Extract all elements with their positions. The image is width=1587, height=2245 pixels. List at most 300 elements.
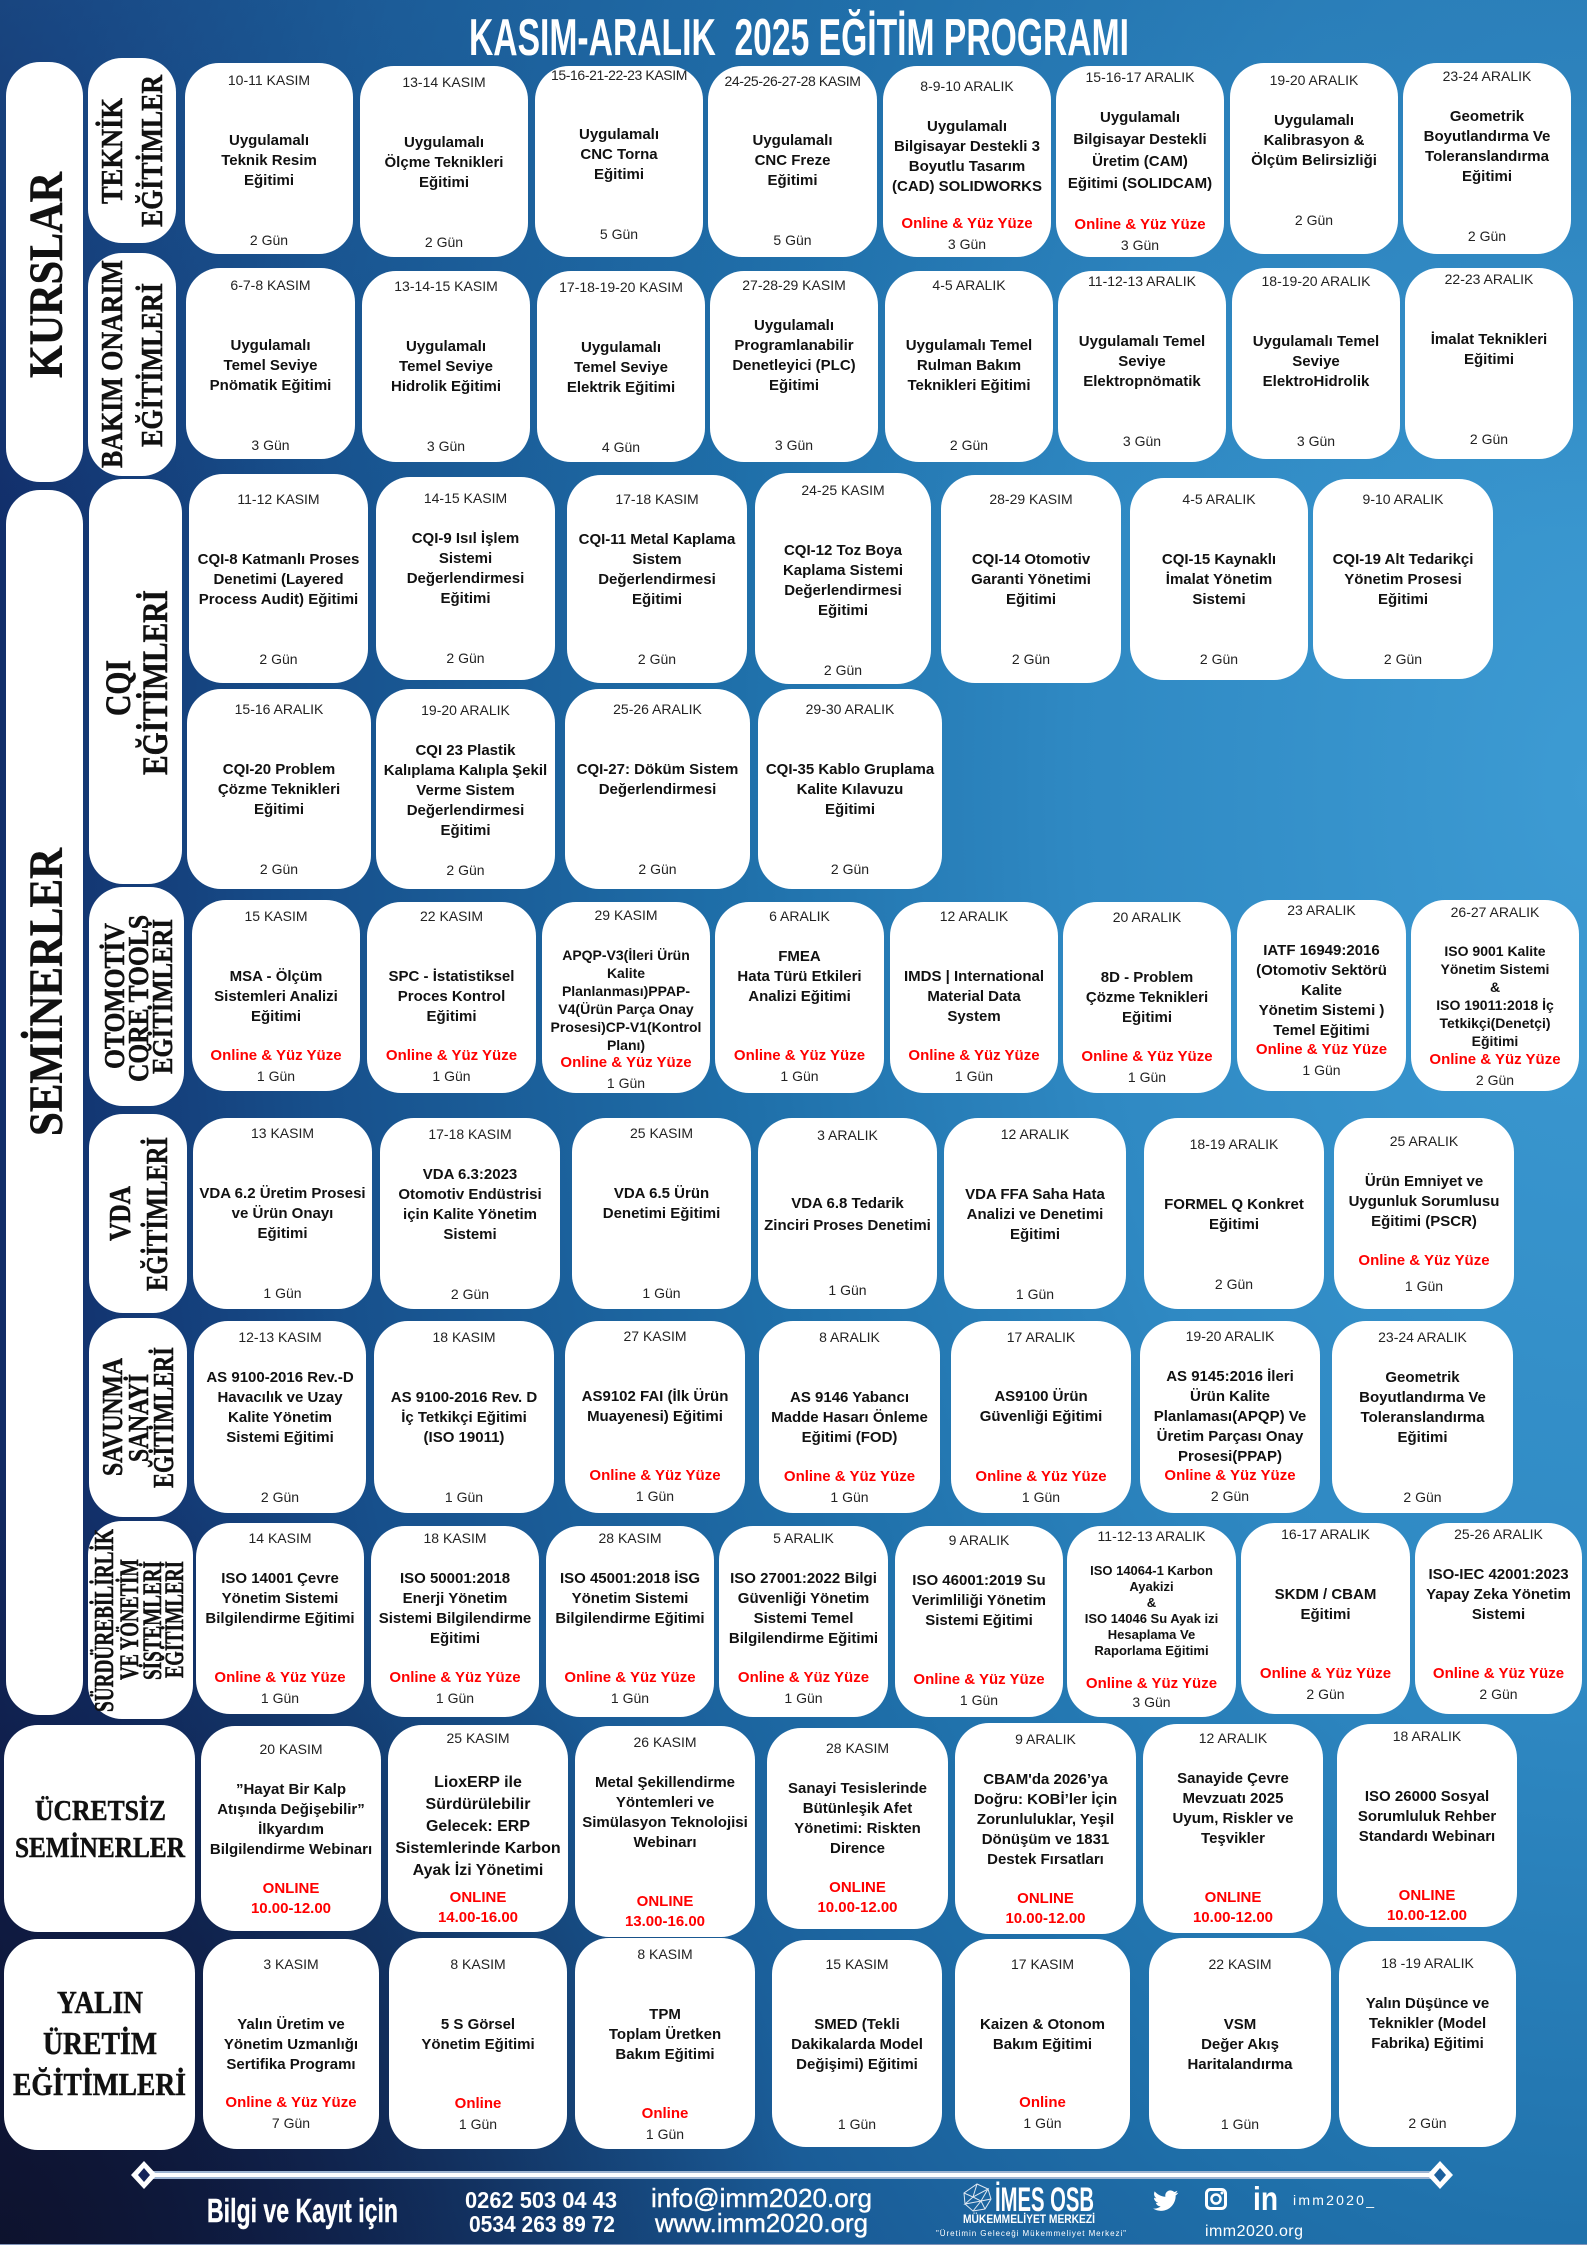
duration: 2 Gün: [1211, 1488, 1249, 1504]
panel: ÜCRETSİZ SEMİNERLER: SEMİNERLER: [15, 1833, 186, 1864]
date: 11-12-13 ARALIK: [1088, 273, 1196, 289]
card: SKDM / CBAM: [1241, 1523, 1410, 1714]
course title: Kaplama Sistemi: [783, 562, 903, 579]
format: Online & Yüz Yüze: [784, 1468, 915, 1485]
format: 13.00-16.00: [625, 1913, 705, 1930]
course title: Güvenliği Eğitimi: [980, 1408, 1102, 1425]
footer: phone numbers: 0262 503 04 43: [465, 2187, 617, 2213]
card: VSM: [1149, 1938, 1331, 2149]
logo: İMES OSB: "Üretimin Geleceği Mükemmeliyet Merkezi": [936, 2229, 1126, 2238]
course title: Eğitimi: [244, 172, 294, 189]
course title: [1256, 942, 1387, 1039]
course title: FMEA: [778, 948, 821, 965]
duration: 1 Gün: [1221, 2116, 1259, 2132]
course title: Dakikalarda Model: [791, 2036, 923, 2053]
format: Online & Yüz Yüze: [908, 1047, 1040, 1064]
course title: [579, 126, 659, 183]
card: Geometrik Boyutlandırma: [1403, 63, 1571, 254]
course title: Çözme Teknikleri: [1086, 989, 1208, 1006]
duration: 1 Gün: [1016, 1286, 1054, 1302]
format: Online & Yüz Yüze: [589, 1467, 721, 1484]
card: Yalın Üretim: [203, 1939, 379, 2149]
course title: [1333, 551, 1473, 608]
card: CQI-20: [187, 689, 371, 889]
duration: 1 Gün: [607, 1075, 645, 1091]
format: Online & Yüz Yüze: [210, 1047, 342, 1064]
course title: System: [947, 1008, 1001, 1025]
card: Kalibrasyon: [1230, 63, 1398, 254]
course title: Yönetim Sistemi ): [1259, 1002, 1384, 1019]
course title: Yönetim Uzmanlığı: [224, 2036, 358, 2053]
course title: Ölçme Teknikleri: [385, 154, 503, 171]
card: VDA 6.8: [758, 1118, 937, 1309]
course title: Eğitimi: [1472, 1033, 1518, 1049]
footer divider with diamonds: [131, 2161, 1453, 2189]
course title: Sistemi Bilgilendirme: [379, 1610, 531, 1627]
card: FMEA: [715, 902, 884, 1093]
course title: [196, 1569, 364, 1629]
card: IMDS: [890, 902, 1058, 1093]
format: Online & Yüz Yüze: [1256, 1041, 1387, 1058]
course title: [1086, 969, 1208, 1026]
duration: 1 Gün: [445, 1489, 483, 1505]
course title: İmalat Yönetim: [1166, 571, 1272, 588]
course title: Metal Şekillendirme: [595, 1774, 735, 1791]
course title: ISO 9001 Kalite: [1444, 943, 1546, 959]
date: 18-19 ARALIK: [1190, 1136, 1278, 1152]
course title: CNC Freze: [755, 152, 830, 169]
duration: 5 Gün: [600, 226, 638, 242]
duration: 2 Gün: [1200, 651, 1238, 667]
course title: Değer Akış: [1201, 2036, 1279, 2053]
date: 12 ARALIK: [1001, 1126, 1069, 1142]
duration: 1 Gün: [261, 1690, 299, 1706]
date: 9 ARALIK: [949, 1532, 1009, 1548]
course title: ISO-IEC 42001:2023: [1428, 1566, 1569, 1583]
format: Online & Yüz Yüze: [564, 1669, 696, 1686]
panel: VDA EĞİTİMLERİ: VDA: [102, 1186, 137, 1241]
panel: SEMİNERLER: SEMİNERLER: [20, 847, 73, 1136]
course title: [1332, 1368, 1513, 1448]
course title: [1162, 551, 1276, 608]
course title: [1431, 331, 1547, 368]
course title: AS 9145:2016 İleri: [1166, 1368, 1294, 1385]
panel: KURSLAR: KURSLAR: [20, 171, 73, 378]
course title: (ISO 19011): [424, 1429, 504, 1446]
course title: Eğitimi: [440, 590, 490, 607]
panel: YALIN ÜRETİM EĞİTİMLERİ: [4, 1939, 195, 2150]
format: Online & Yüz Yüze: [1074, 216, 1206, 233]
course title: Hata Türü Etkileri: [737, 968, 862, 985]
course title: [1149, 2015, 1331, 2075]
course title: Prosesi)CP-V1(Kontrol: [551, 1019, 701, 1035]
course title: CQI-15 Kaynaklı: [1162, 551, 1276, 568]
panel: SÜRDÜREBİLİRLİK VE YÖNETİM SİSTEMLERİ EĞİTİMLERİ: VE YÖNETİM: [115, 1559, 144, 1680]
course title: İmalat Teknikleri: [1431, 331, 1547, 348]
panel: SAVUNMA SANAYİ EĞİTİMLERİ: EĞİTİMLERİ: [147, 1347, 180, 1488]
panel: VDA EĞİTİMLERİ: [89, 1114, 187, 1313]
panel: OTOMOTİV CORE TOOLS EĞİTİMLERİ: [89, 887, 184, 1106]
icon: twitter: [1153, 2190, 1178, 2211]
date: 25 KASIM: [630, 1125, 693, 1141]
card: CQI-11: [567, 475, 747, 683]
duration: 2 Gün: [638, 651, 676, 667]
panel: SAVUNMA SANAYİ EĞİTİMLERİ: SANAYİ: [122, 1374, 155, 1462]
course title: [567, 339, 675, 396]
date: 13-14 KASIM: [402, 74, 486, 90]
course title: [1251, 112, 1377, 169]
course title: Gelecek: ERP: [426, 1818, 530, 1835]
duration: 3 Gün: [1297, 433, 1335, 449]
panel: BAKIM ONARIM EĞİTİMLERİ: BAKIM ONARIM: [94, 260, 129, 468]
card: CQI 23: [376, 689, 555, 889]
course title: Enerji Yönetim: [403, 1590, 507, 1607]
course title: AS 9146 Yabancı: [790, 1389, 909, 1406]
course title: Sanayi Tesislerinde: [788, 1780, 927, 1797]
course title: CQI-35 Kablo Gruplama: [766, 761, 934, 778]
panel: OTOMOTİV CORE TOOLS EĞİTİMLERİ: EĞİTİMLERİ: [146, 919, 179, 1074]
panel: YALIN ÜRETİM EĞİTİMLERİ: EĞİTİMLERİ: [13, 2066, 186, 2102]
course title: [214, 968, 338, 1025]
course title: Eğitimi: [1378, 591, 1428, 608]
date: 29 KASIM: [594, 907, 658, 923]
date: 15 KASIM: [825, 1956, 889, 1972]
duration: 2 Gün: [1403, 1489, 1442, 1505]
course title: [398, 1166, 542, 1243]
course title: Sistemi Temel: [754, 1610, 853, 1627]
format: [1337, 1886, 1517, 1926]
course title: [221, 132, 317, 189]
course title: Yönetim Sistemi: [572, 1590, 688, 1607]
format: ONLINE: [1399, 1887, 1455, 1904]
card: Metal Şekillendirme: [575, 1726, 755, 1937]
course title: [759, 1388, 940, 1448]
format: ONLINE: [1017, 1890, 1074, 1907]
panel: KURSLAR: [6, 62, 83, 482]
duration: 1 Gün: [838, 2116, 876, 2132]
course title: AS9100 Ürün: [994, 1388, 1088, 1405]
course title: Ayakizi: [1129, 1579, 1174, 1594]
course title: Analizi ve Denetimi: [967, 1206, 1103, 1223]
panel: CQI EĞİTİMLERİ: EĞİTİMLERİ: [135, 590, 175, 775]
format: Online: [455, 2095, 501, 2112]
card: Teknik Resim: [185, 63, 353, 254]
course title: Planlaması(APQP) Ve: [1154, 1408, 1306, 1425]
footer: phone numbers: 0534 263 89 72: [469, 2211, 615, 2237]
course title: Bilgilendirme Eğitimi: [729, 1630, 878, 1647]
card: CQI-19: [1313, 479, 1493, 679]
course title: Eğitimi: [1122, 1009, 1172, 1026]
format: ONLINE: [1205, 1889, 1261, 1906]
duration: 2 Gün: [638, 861, 677, 877]
course title: Standardı Webinarı: [1359, 1828, 1495, 1845]
course title: Boyutlandırma Ve: [1359, 1389, 1486, 1406]
course title: Sistem: [632, 551, 682, 568]
date: 13-14-15 KASIM: [394, 278, 498, 294]
format: Online & Yüz Yüze: [913, 1671, 1045, 1688]
course title: CQI 23 Plastik: [415, 742, 516, 759]
course title: [579, 531, 736, 608]
course title: Planlanması)PPAP-: [562, 983, 690, 999]
course title: Uygulamalı: [579, 126, 659, 143]
duration: 2 Gün: [831, 861, 869, 877]
format: Online & Yüz Yüze: [214, 1669, 346, 1686]
duration: 1 Gün: [459, 2116, 497, 2132]
date: 18 KASIM: [432, 1329, 496, 1345]
date: 20 ARALIK: [1113, 909, 1181, 925]
date: 19-20 ARALIK: [1270, 72, 1358, 88]
course title: Eğitimi: [1300, 1606, 1350, 1623]
course title: İlkyardım: [258, 1821, 324, 1838]
course title: Programlanabilir: [734, 337, 854, 354]
course title: [906, 337, 1032, 394]
course title: Uygulamalı: [1274, 112, 1354, 129]
course title: Sertifika Programı: [226, 2056, 356, 2073]
course title: Tetkikçi(Denetçi): [1440, 1015, 1550, 1031]
panel: SÜRDÜREBİLİRLİK VE YÖNETİM SİSTEMLERİ EĞİTİMLERİ: SİSTEMLERİ: [138, 1561, 167, 1680]
course title: SMED (Tekli: [814, 2016, 900, 2033]
course title: [732, 317, 856, 394]
duration: 1 Gün: [1405, 1278, 1443, 1294]
format: [1143, 1888, 1323, 1928]
card: VDA FFA: [944, 1118, 1126, 1309]
course title: Rulman Bakım: [917, 357, 1021, 374]
card: İmalat Teknikleri: [1405, 268, 1573, 459]
course title: [1424, 108, 1550, 185]
card: IATF: [1237, 900, 1406, 1091]
course title: [971, 551, 1091, 608]
course title: Simülasyon Teknolojisi: [582, 1814, 748, 1831]
panel: ÜCRETSİZ SEMİNERLER: [4, 1725, 195, 1932]
card: AS 9145: [1140, 1321, 1320, 1513]
panel: TEKNİK EĞİTİMLER: [88, 58, 176, 243]
course title: ve Ürün Onayı: [232, 1205, 333, 1222]
duration: 2 Gün: [1384, 651, 1422, 667]
duration: 2 Gün: [425, 234, 463, 250]
course title: Elektrik Eğitimi: [567, 379, 675, 396]
panel: CQI EĞİTİMLERİ: CQI: [98, 660, 138, 716]
card: VDA 6.2: [193, 1118, 372, 1309]
course title: Eğitimi: [769, 377, 819, 394]
course title: Eğitimi: [767, 172, 818, 189]
course title: Yalın Düşünce ve: [1366, 1995, 1489, 2012]
course title: CNC Torna: [580, 146, 658, 163]
date: 12-13 KASIM: [238, 1329, 322, 1345]
date: 14-15 KASIM: [424, 490, 507, 506]
course title: [575, 1773, 755, 1853]
course title: Eğitimi: [440, 822, 490, 839]
course title: Eğitimi: [1462, 168, 1512, 185]
course title: [389, 2015, 567, 2055]
date: 17-18-19-20 KASIM: [559, 279, 683, 295]
course title: ISO 14001 Çevre: [221, 1570, 339, 1587]
panel: YALIN ÜRETİM EĞİTİMLERİ: YALIN: [57, 1984, 143, 2020]
course title: [198, 551, 359, 608]
course title: ISO 14064-1 Karbon: [1090, 1563, 1213, 1578]
duration: 1 Gün: [1128, 1069, 1166, 1085]
card: ISO 45001: [546, 1526, 714, 1717]
course title: Kalite: [1301, 982, 1342, 999]
date: 17-18 KASIM: [615, 491, 699, 507]
course title: Bilgisayar Destekli 3: [894, 138, 1040, 155]
date: 15-16 ARALIK: [235, 701, 323, 717]
duration: 1 Gün: [646, 2126, 684, 2142]
course title: Kaizen & Otonom: [980, 2016, 1105, 2033]
course title: Uygunluk Sorumlusu: [1349, 1193, 1499, 1210]
date: 25 ARALIK: [1390, 1133, 1458, 1149]
date: 10-11 KASIM: [228, 72, 310, 88]
course title: Kalibrasyon &: [1264, 132, 1364, 149]
course title: [577, 761, 738, 798]
course title: Değişimi) Eğitimi: [796, 2056, 918, 2073]
date: 28 KASIM: [826, 1740, 889, 1756]
date: 23-24 ARALIK: [1378, 1329, 1467, 1345]
date: 9-10 ARALIK: [1363, 491, 1443, 507]
course title: Eğitimi (PSCR): [1371, 1213, 1477, 1230]
format: Online & Yüz Yüze: [225, 2094, 357, 2111]
course title: İç Tetkikçi Eğitimi: [401, 1409, 527, 1426]
website url: imm2020.org: [1205, 2223, 1303, 2240]
course title: [407, 530, 524, 607]
course title: Yönetim Sistemi: [222, 1590, 338, 1607]
course title: AS 9100-2016 Rev.-D: [206, 1369, 354, 1386]
course title: Sistemi: [443, 1226, 497, 1243]
course title: [385, 134, 503, 191]
course title: Hesaplama Ve: [1108, 1627, 1195, 1642]
format: [575, 1892, 755, 1932]
course title: Ayak İzi Yönetimi: [413, 1862, 543, 1879]
course title: [1253, 333, 1379, 390]
panel: SÜRDÜREBİLİRLİK VE YÖNETİM SİSTEMLERİ EĞİTİMLERİ: EĞİTİMLERİ: [160, 1561, 189, 1678]
format: 10.00-12.00: [251, 1900, 331, 1917]
course title: Eğitimi: [632, 591, 682, 608]
date: 17-18 KASIM: [428, 1126, 512, 1142]
date: 6-7-8 KASIM: [230, 277, 311, 293]
course title: Seviye: [1292, 353, 1340, 370]
card: LioxERP: [388, 1725, 568, 1932]
card: CBAM 2026: [955, 1723, 1136, 1934]
course title: Teknikleri Eğitimi: [907, 377, 1031, 394]
course title: Havacılık ve Uzay: [217, 1389, 343, 1406]
duration: 2 Gün: [1295, 212, 1333, 228]
course title: Bilgilendirme Eğitimi: [555, 1610, 705, 1627]
course title: Uygulamalı: [752, 132, 833, 149]
footer: registration label: Bilgi ve Kayıt için: [207, 2192, 398, 2229]
course title: SPC - İstatistiksel: [389, 968, 514, 985]
duration: 2 Gün: [1479, 1686, 1518, 1702]
duration: 5 Gün: [773, 232, 812, 248]
date: 15-16-17 ARALIK: [1086, 69, 1194, 85]
course title: Kalite: [607, 965, 645, 981]
course title: Verimliliği Yönetim: [912, 1592, 1046, 1609]
course title: 5 S Görsel: [441, 2016, 515, 2033]
course title: CQI-20 Problem: [223, 761, 335, 778]
date: 17 ARALIK: [1007, 1329, 1075, 1345]
duration: 2 Gün: [1468, 228, 1506, 244]
course title: [203, 2015, 379, 2075]
panel: ÜCRETSİZ SEMİNERLER: ÜCRETSİZ: [35, 1796, 166, 1827]
card: APQP: [542, 902, 710, 1093]
course title: Seviye: [1118, 353, 1166, 370]
course title: Garanti Yönetimi: [971, 571, 1091, 588]
card: SOLIDCAM: [1056, 66, 1224, 257]
card: SPC: [367, 902, 536, 1093]
course title: ISO 19011:2018 İç: [1436, 997, 1554, 1013]
date: 26 KASIM: [633, 1734, 697, 1750]
course title: Haritalandırma: [1187, 2056, 1293, 2073]
panel: OTOMOTİV CORE TOOLS EĞİTİMLERİ: OTOMOTİV: [98, 923, 131, 1069]
course title: MSA - Ölçüm: [230, 968, 322, 985]
date: 26-27 ARALIK: [1451, 904, 1539, 920]
course title: Planı): [607, 1037, 645, 1053]
course title: [767, 1779, 948, 1859]
course title: Teknik Resim: [221, 152, 317, 169]
date: 22-23 ARALIK: [1445, 271, 1533, 287]
card: Elektropnömatik: [1058, 271, 1226, 462]
card: MSA: [192, 900, 360, 1091]
course title: [1241, 1585, 1410, 1625]
course title: Eğitimi: [825, 801, 875, 818]
duration: 1 Gün: [1022, 1489, 1060, 1505]
format: 10.00-12.00: [1193, 1909, 1273, 1926]
format: 10.00-12.00: [817, 1899, 898, 1916]
course title: Dönüşüm ve 1831: [982, 1831, 1109, 1848]
course title: [1339, 1994, 1516, 2054]
course title: Uyum, Riskler ve: [1173, 1810, 1293, 1827]
panel: SEMİNERLER: [6, 490, 83, 1715]
duration: 1 Gün: [642, 1285, 681, 1301]
card: CQI-27: [565, 689, 750, 889]
date: 24-25 KASIM: [801, 482, 885, 498]
card: ISO 50001: [371, 1526, 539, 1717]
course title: CQI-8 Katmanlı Proses: [198, 551, 359, 568]
course title: [575, 2005, 755, 2065]
course title: Zorunluluklar, Yeşil: [977, 1811, 1114, 1828]
duration: 1 Gün: [784, 1690, 823, 1706]
course title: Yapay Zeka Yönetim: [1426, 1586, 1571, 1603]
panel: BAKIM ONARIM EĞİTİMLERİ: [88, 253, 176, 476]
course title: Atışında Değişebilir”: [217, 1801, 365, 1818]
course title: Değerlendirmesi: [598, 571, 716, 588]
duration: 2 Gün: [950, 437, 988, 453]
course title: Bakım Eğitimi: [615, 2046, 715, 2063]
format: Online & Yüz Yüze: [734, 1047, 865, 1064]
course title: Destek Fırsatları: [987, 1851, 1104, 1868]
course title: Sistemleri Analizi: [214, 988, 338, 1005]
course title: Toleranslandırma: [1361, 1409, 1484, 1426]
format: 10.00-12.00: [1387, 1907, 1467, 1924]
course title: VDA FFA Saha Hata: [965, 1186, 1105, 1203]
course title: Eğitimi: [254, 801, 304, 818]
course title: ”Hayat Bir Kalp: [236, 1781, 346, 1798]
course title: Verme Sistem: [416, 782, 515, 799]
format: [767, 1878, 948, 1918]
course title: [210, 337, 331, 394]
course title: [194, 1368, 366, 1448]
course title: LioxERP ile: [434, 1774, 522, 1791]
course title: Eğitimi: [1010, 1226, 1060, 1243]
date: 13 KASIM: [251, 1125, 314, 1141]
panel: SAVUNMA SANAYİ EĞİTİMLERİ: [89, 1318, 187, 1517]
duration: 1 Gün: [263, 1285, 302, 1301]
card: ISO 14001: [196, 1523, 364, 1714]
card: ISO 27001: [719, 1526, 888, 1717]
course title: Uygulamalı Temel: [1253, 333, 1379, 350]
course title: V4(Ürün Parça Onay: [558, 1001, 694, 1017]
course title: Madde Hasarı Önleme: [771, 1409, 928, 1426]
course title: IMDS | International: [904, 968, 1044, 985]
course title: Bütünleşik Afet: [803, 1800, 912, 1817]
